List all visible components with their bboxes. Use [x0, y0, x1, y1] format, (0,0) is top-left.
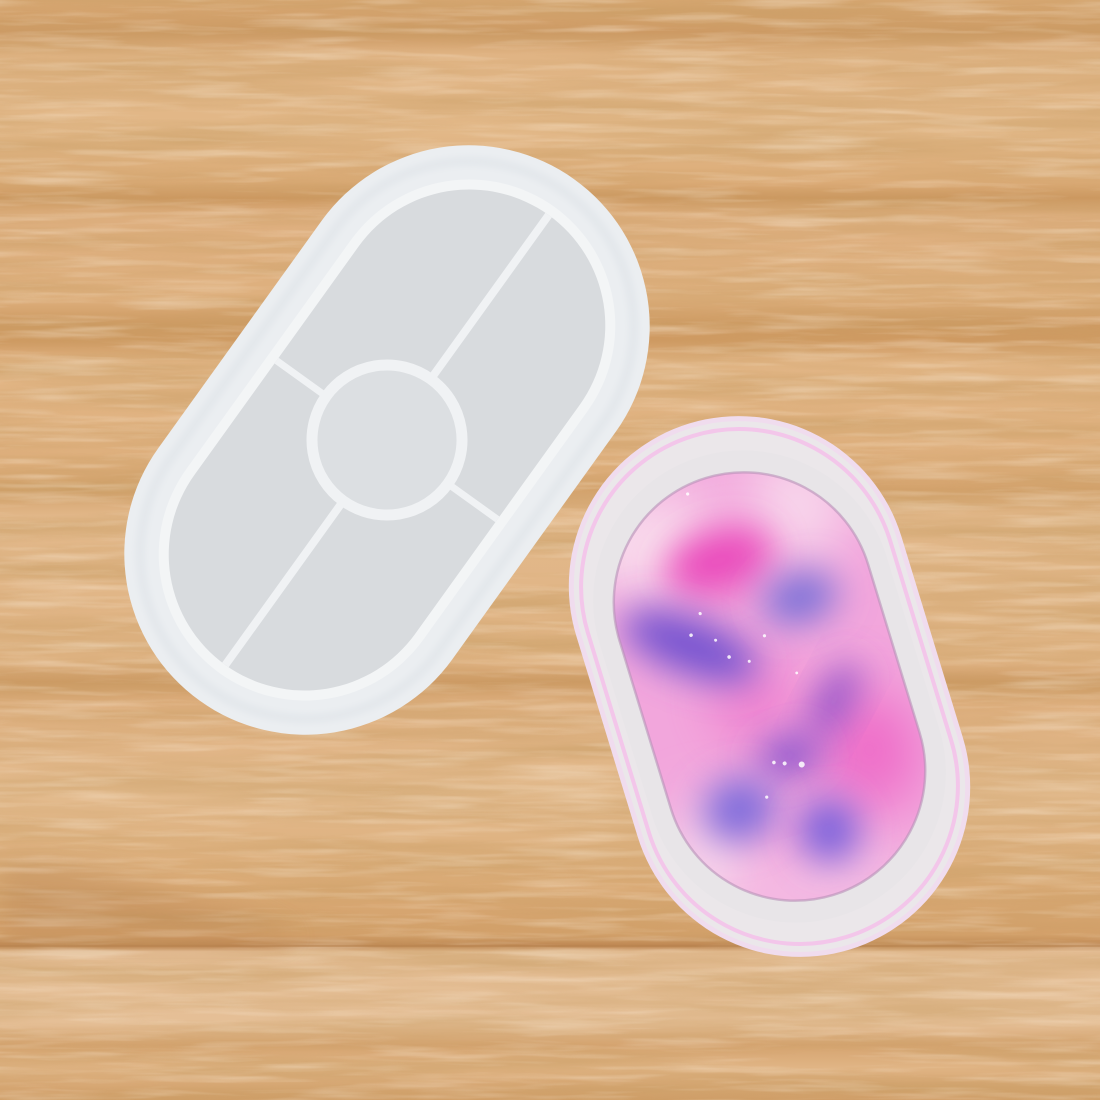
mold outer body [53, 74, 721, 806]
tray pink rim line [542, 390, 997, 983]
silicone mold [53, 74, 721, 806]
violet blooms [613, 594, 767, 698]
light cloud patches [614, 480, 730, 612]
mold rim shading [75, 96, 699, 784]
tray outer wall [533, 380, 1006, 993]
tray marbled surface [614, 472, 926, 900]
mold cavity floor [115, 136, 659, 744]
mold central circle [282, 335, 492, 545]
mold long divider [222, 213, 552, 667]
mold cross divider [275, 358, 499, 522]
resin tray [568, 416, 970, 957]
glitter [686, 492, 805, 799]
tray outer edge [527, 374, 1012, 999]
tray surface edge [581, 440, 958, 933]
mold cavity rim [101, 122, 673, 758]
tray inner wall [556, 413, 983, 960]
